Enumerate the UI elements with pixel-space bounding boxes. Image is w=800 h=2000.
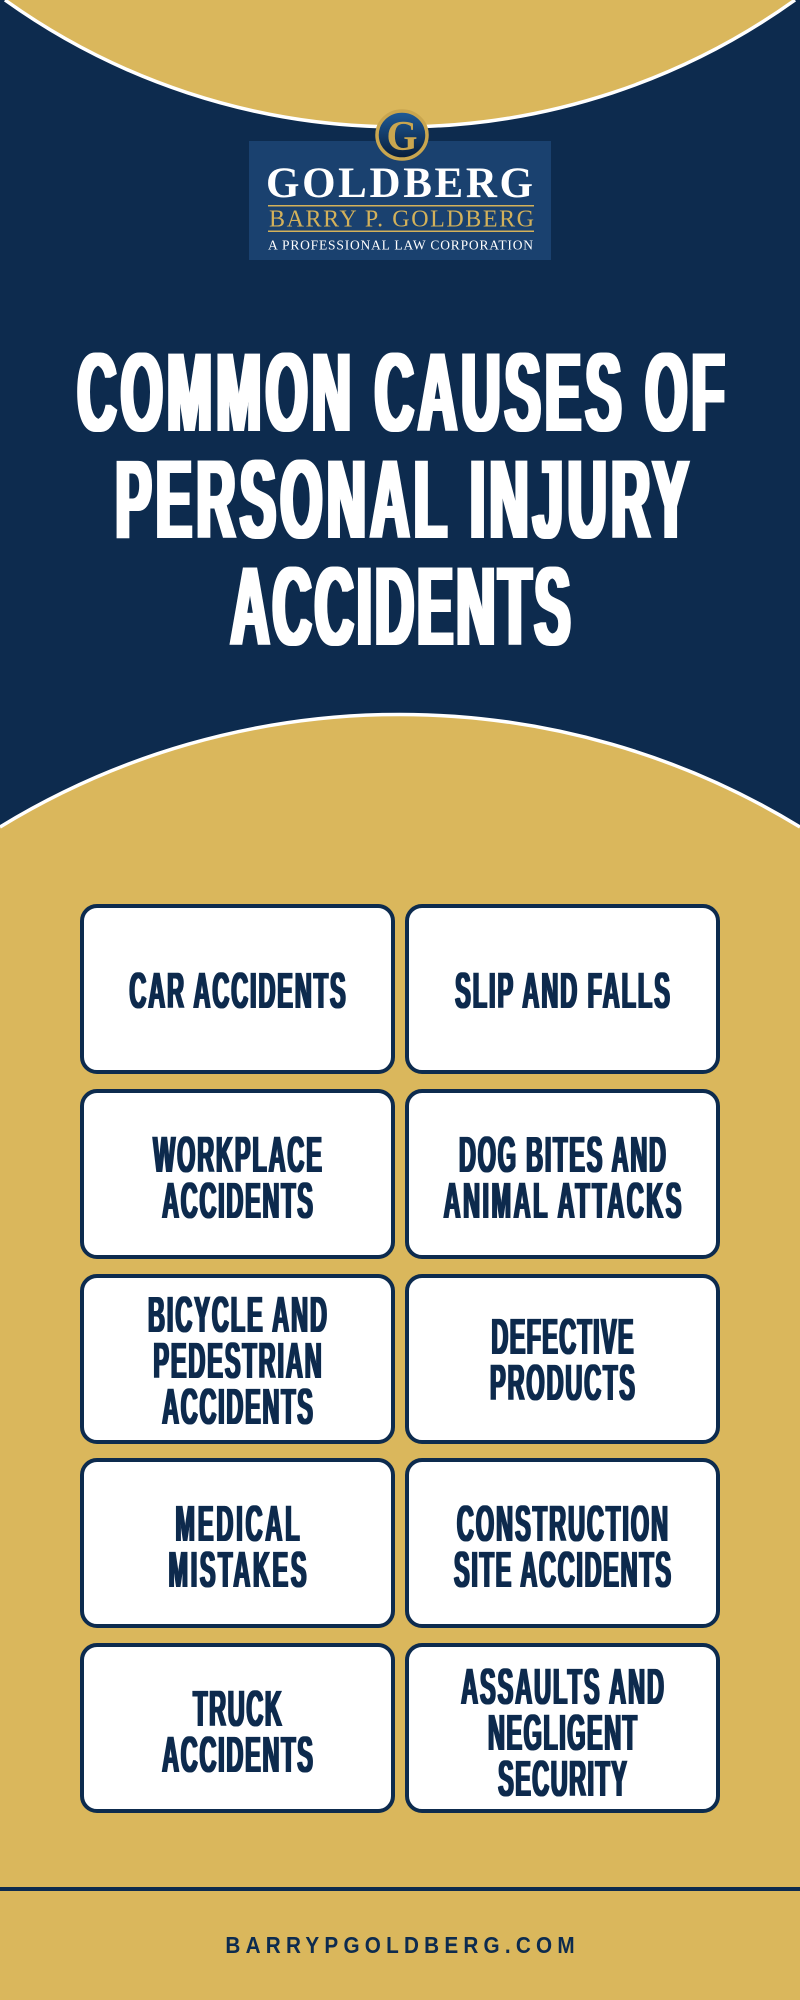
card: workplace accidents: WORKPLACE [153, 1127, 322, 1184]
logo wordmark: GOLDBERG [266, 160, 533, 207]
card: truck accidents: TRUCK [193, 1681, 282, 1738]
logo rule bottom [268, 230, 534, 232]
card: assaults and negligent security: ASSAULTS AND [461, 1659, 664, 1716]
card: assaults and negligent security [407, 1645, 718, 1811]
card: slip and falls [407, 906, 718, 1072]
card: assaults and negligent security: NEGLIGENT [488, 1705, 637, 1762]
logo emblem: G [386, 114, 418, 160]
card: defective products: DEFECTIVE [491, 1309, 634, 1366]
card: bicycle and pedestrian accidents [82, 1276, 393, 1442]
card: construction site accidents: CONSTRUCTION [457, 1496, 668, 1553]
card: car accidents [82, 906, 393, 1072]
card: construction site accidents [407, 1460, 718, 1626]
logo name: BARRY P. GOLDBERG [269, 206, 534, 232]
title: PERSONAL INJURY [115, 436, 689, 562]
card: truck accidents [82, 1645, 393, 1811]
card: dog bites and animal attacks [407, 1091, 718, 1257]
card: medical mistakes: MISTAKES [168, 1542, 307, 1599]
card: truck accidents: ACCIDENTS [162, 1727, 313, 1784]
card: assaults and negligent security: SECURITY [498, 1751, 627, 1808]
card: bicycle and pedestrian accidents: ACCIDENTS [162, 1379, 313, 1436]
title: ACCIDENTS [231, 543, 570, 669]
footer url: BARRYPGOLDBERG.COM [225, 1932, 575, 1958]
card: workplace accidents: ACCIDENTS [162, 1173, 313, 1230]
logo panel [249, 141, 551, 260]
logo tagline: A PROFESSIONAL LAW CORPORATION [268, 238, 533, 252]
card: slip and falls: SLIP AND FALLS [455, 963, 670, 1020]
card: medical mistakes [82, 1460, 393, 1626]
card: construction site accidents: SITE ACCIDENTS [454, 1542, 671, 1599]
card: dog bites and animal attacks: DOG BITES AND [459, 1127, 666, 1184]
logo [249, 111, 551, 260]
title: COMMON CAUSES OF [77, 329, 725, 455]
lower gold panel [0, 714, 800, 2000]
title [77, 329, 725, 669]
top gold arc [5, 0, 795, 127]
card: bicycle and pedestrian accidents: PEDESTRIAN [153, 1333, 322, 1390]
card: medical mistakes: MEDICAL [175, 1496, 300, 1553]
card: defective products: PRODUCTS [490, 1355, 635, 1412]
card: workplace accidents [82, 1091, 393, 1257]
card: defective products [407, 1276, 718, 1442]
logo emblem [377, 111, 427, 160]
logo rule top [268, 205, 534, 206]
card: bicycle and pedestrian accidents: BICYCLE AND [148, 1287, 327, 1344]
card: dog bites and animal attacks: ANIMAL ATTACKS [444, 1173, 681, 1230]
card: car accidents: CAR ACCIDENTS [129, 963, 346, 1020]
